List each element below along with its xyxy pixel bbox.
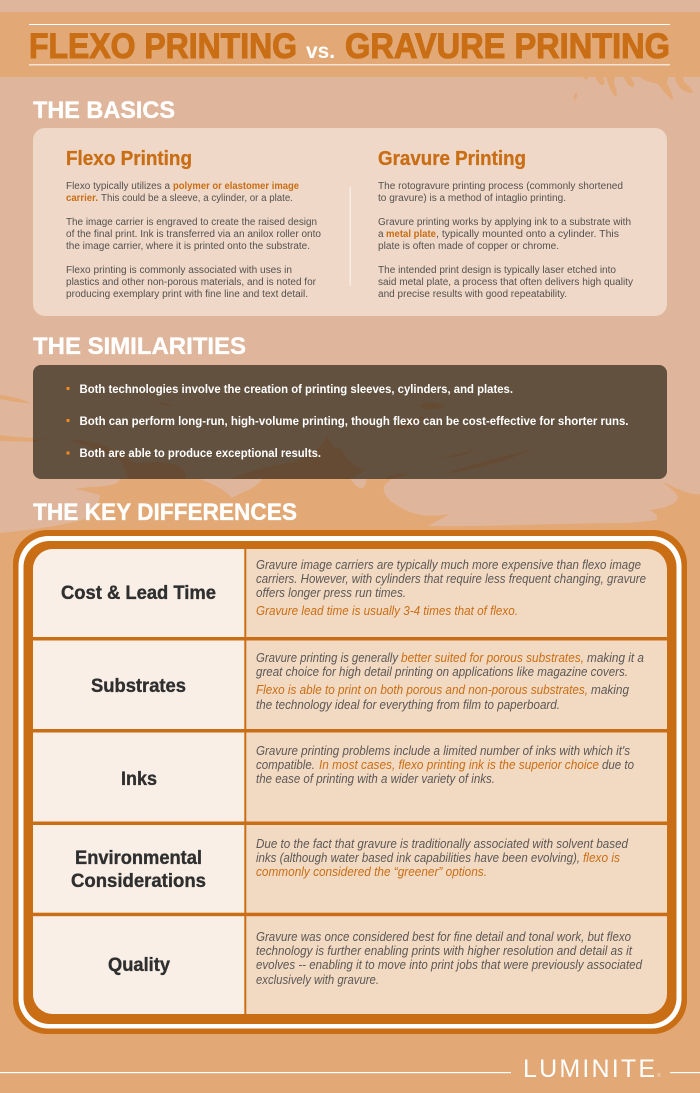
row: cost and lead time: Gravure image carriers are typically much more expensive than flexo image (256, 558, 641, 572)
title text: vs. (306, 40, 335, 63)
row: substrates: making (591, 683, 629, 697)
flexo column: Flexo printing is commonly associated with uses in (66, 265, 292, 276)
row: substrates: great choice for high detail printing on applications like magazine covers. (256, 665, 628, 679)
heading: the basics: THE BASICS (33, 97, 175, 124)
row: inks: In most cases, flexo printing ink is the superior choice (319, 758, 599, 772)
flexo column: This could be a sleeve, a cylinder, or a plate. (101, 193, 293, 204)
row: inks: Inks (121, 769, 157, 790)
panel: the basics (33, 128, 667, 316)
row: environmental considerations: inks (although water based ink capabilities have been evolving), (256, 851, 580, 865)
panel: the similarities (33, 365, 667, 479)
gravure column (378, 148, 633, 300)
bullet list: Both can perform long-run, high-volume printing, though flexo can be cost-effective for shorter runs. (80, 414, 628, 428)
row: quality: Quality (108, 955, 170, 976)
row: environmental considerations (71, 837, 629, 892)
footer logo: Luminite: ® (657, 1072, 661, 1079)
gravure column: The intended print design is typically laser etched into (378, 265, 616, 276)
flexo column (66, 148, 321, 300)
flexo column: carrier. (66, 193, 98, 204)
gravure column: metal plate (386, 229, 436, 240)
row: quality: technology is further enabling prints with higher resolution and detail as it (256, 944, 632, 958)
flexo column: producing exemplary print with fine line and text detail. (66, 289, 308, 300)
row: inks: the ease of printing with a wider variety of inks. (256, 772, 495, 786)
flexo column: Flexo typically utilizes a (66, 181, 170, 192)
row: cost and lead time: offers longer press run times. (256, 586, 406, 600)
bullet list: Both technologies involve the creation of printing sleeves, cylinders, and plates. (80, 382, 513, 396)
row: cost and lead time: Gravure lead time is usually 3-4 times that of flexo. (256, 604, 518, 618)
row: inks: Gravure printing problems include a limited number of inks with which it's (256, 744, 630, 758)
footer logo: Luminite: LUMINITE (523, 1055, 655, 1083)
row: cost and lead time: Cost & Lead Time (61, 583, 216, 604)
row: quality: exclusively with gravure. (256, 973, 379, 987)
bullet list: Both are able to produce exceptional results. (80, 446, 321, 460)
gravure column: to gravure) is a method of intaglio printing. (378, 193, 566, 204)
row: substrates: Gravure printing is generally (256, 651, 399, 665)
row: inks: due to (602, 758, 634, 772)
row: substrates: making it a (587, 651, 644, 665)
row: environmental considerations: Due to the fact that gravure is traditionally associated with solvent based (256, 837, 629, 851)
flexo column: the image carrier, where it is printed onto the substrate. (66, 241, 310, 252)
title banner (0, 12, 700, 77)
row: quality: Gravure was once considered best for fine detail and tonal work, but flexo (256, 930, 631, 944)
gravure column: said metal plate, a process that often delivers high quality (378, 277, 633, 288)
gravure column: plate is often made of copper or chrome. (378, 241, 559, 252)
comparison table (13, 530, 687, 1034)
row: cost and lead time: carriers. However, with cylinders that require less frequent changing, gravure (256, 572, 646, 586)
row: environmental considerations: flexo is (583, 851, 620, 865)
gravure column: and precise results with good repeatability. (378, 289, 567, 300)
flexo column: Flexo Printing (66, 148, 192, 170)
bullet list (66, 382, 628, 460)
title text: GRAVURE PRINTING (345, 26, 670, 66)
row: substrates: Flexo is able to print on both porous and non-porous substrates, (256, 683, 588, 697)
flexo column: polymer or elastomer image (173, 181, 299, 192)
title text: FLEXO PRINTING (29, 26, 297, 66)
row: inks (121, 744, 634, 790)
row: cost and lead time (61, 558, 646, 618)
row: inks: compatible. (256, 758, 315, 772)
row: substrates (91, 651, 644, 712)
flexo column: plastics and other non-porous materials, and is noted for (66, 277, 317, 288)
row: environmental considerations: Environmental (75, 848, 202, 869)
row: environmental considerations: Considerations (71, 871, 206, 892)
gravure column: The rotogravure printing process (commonly shortened (378, 181, 623, 192)
row: quality: evolves -- enabling it to move into print jobs that were previously associated (256, 958, 643, 972)
title text (29, 26, 670, 66)
row: substrates: the technology ideal for everything from film to paperboard. (256, 698, 560, 712)
row: substrates: better suited for porous substrates, (401, 651, 584, 665)
gravure column: a (378, 229, 384, 240)
heading: the key differences: THE KEY DIFFERENCES (33, 499, 297, 526)
row: environmental considerations: commonly considered the “greener” options. (256, 865, 487, 879)
row: quality (108, 930, 643, 987)
gravure column: Gravure printing works by applying ink to a substrate with (378, 217, 631, 228)
row: substrates: Substrates (91, 676, 186, 697)
heading: the similarities: THE SIMILARITIES (33, 333, 246, 360)
flexo column: The image carrier is engraved to create the raised design (66, 217, 317, 228)
gravure column: , typically mounted onto a cylinder. This (436, 229, 619, 240)
flexo column: of the final print. Ink is transferred via an anilox roller onto (66, 229, 321, 240)
gravure column: Gravure Printing (378, 148, 526, 170)
footer logo: Luminite (0, 1055, 700, 1083)
